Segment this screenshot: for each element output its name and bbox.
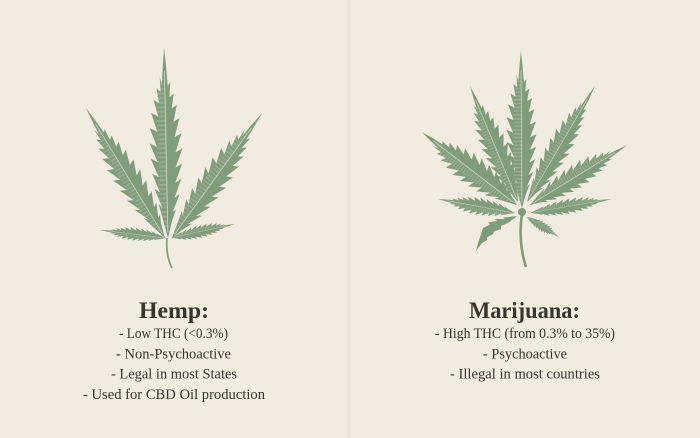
marijuana leaflet: right xyxy=(524,135,633,215)
marijuana fact: illegal: - Illegal in most countries xyxy=(450,366,600,382)
marijuana leaflet: low left xyxy=(437,190,517,222)
marijuana leaflet: left xyxy=(412,120,527,217)
hemp stem xyxy=(167,238,172,268)
hemp fact: legal: - Legal in most States xyxy=(111,366,237,382)
marijuana leaflet: bottom right xyxy=(524,213,562,241)
heading: Marijuana: Marijuana: xyxy=(469,298,580,324)
heading: Hemp: Hemp: xyxy=(139,298,209,324)
hemp fact: CBD oil: - Used for CBD Oil production xyxy=(83,387,265,403)
hemp leaflet: low right xyxy=(170,217,236,245)
marijuana fact: high THC: - High THC (from 0.3% to 35%) xyxy=(435,326,615,342)
text block: hemp xyxy=(83,298,265,403)
hemp leaflet: low left xyxy=(99,223,167,245)
marijuana leaflet: low right xyxy=(529,191,613,221)
marijuana leaflet: bottom left xyxy=(476,216,517,251)
icon: hemp leaf xyxy=(74,48,274,268)
marijuana leaflet: centre xyxy=(506,51,537,208)
hemp leaflet: left xyxy=(74,101,177,246)
text block: marijuana xyxy=(435,298,615,382)
marijuana fact: psychoactive: - Psychoactive xyxy=(483,346,567,362)
marijuana leaflet: upper left xyxy=(458,81,530,207)
marijuana leaf hub xyxy=(518,208,526,216)
hemp leaflet: right xyxy=(160,105,274,247)
hemp leaflet: centre xyxy=(148,48,184,238)
marijuana leaflet: upper right xyxy=(516,80,606,208)
hemp fact: low THC: - Low THC (<0.3%) xyxy=(119,326,228,342)
icon: marijuana leaf xyxy=(412,51,633,267)
hemp fact: non-psychoactive: - Non-Psychoactive xyxy=(116,346,231,362)
marijuana stem xyxy=(521,214,526,267)
